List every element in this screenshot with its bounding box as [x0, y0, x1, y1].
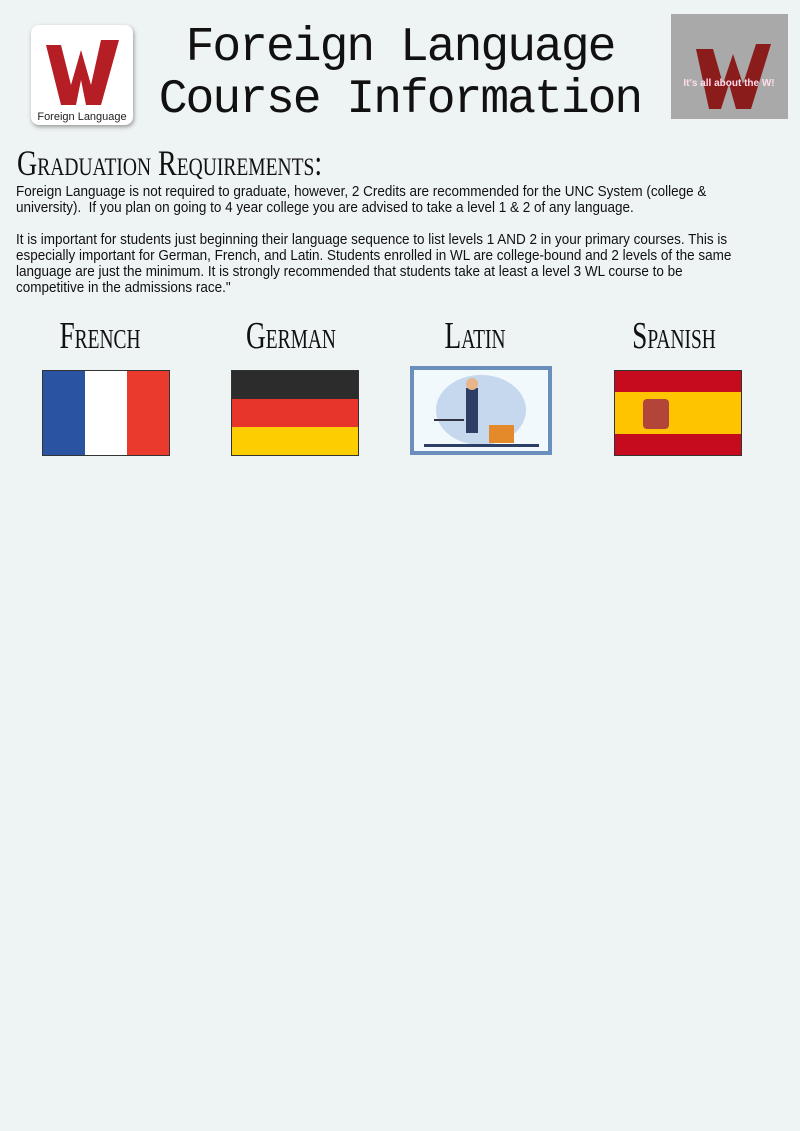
title: Course Information: [159, 73, 641, 127]
text block: It is important for students just beginning their language sequence to list levels 1 AND 2 in your primary courses. This is: [16, 232, 727, 248]
text block: Foreign Language is not required to graduate, however, 2 Credits are recommended for the UNC System (college &: [16, 184, 706, 200]
logo: foreign language: Foreign Language: [37, 111, 127, 123]
heading: German: German: [246, 315, 336, 357]
heading: Latin: Latin: [445, 315, 505, 357]
heading: Spanish: Spanish: [632, 315, 716, 357]
text block: especially important for German, French, and Latin. Students enrolled in WL are college-bound and 2 levels of the same: [16, 248, 731, 264]
title: [159, 21, 641, 127]
title: Foreign Language: [186, 21, 614, 75]
flag: Spain: [614, 370, 742, 456]
heading: French: French: [59, 315, 141, 357]
logo: W: It's all about the W!: [683, 78, 775, 89]
heading: graduation requirements: Graduation Requirements:: [17, 143, 322, 183]
text block: [16, 184, 731, 296]
flag: France: [42, 370, 170, 456]
flag: Germany: [231, 370, 359, 456]
logo: foreign language: [31, 25, 133, 125]
text block: language are just the minimum. It is strongly recommended that students take at least a level 3 WL course to be: [16, 264, 683, 280]
logo: W: [671, 14, 788, 119]
text block: university). If you plan on going to 4 year college you are advised to take a level 1 & 2 of any language.: [16, 200, 634, 216]
image: Latin: [410, 366, 552, 455]
text block: competitive in the admissions race.": [16, 280, 231, 296]
